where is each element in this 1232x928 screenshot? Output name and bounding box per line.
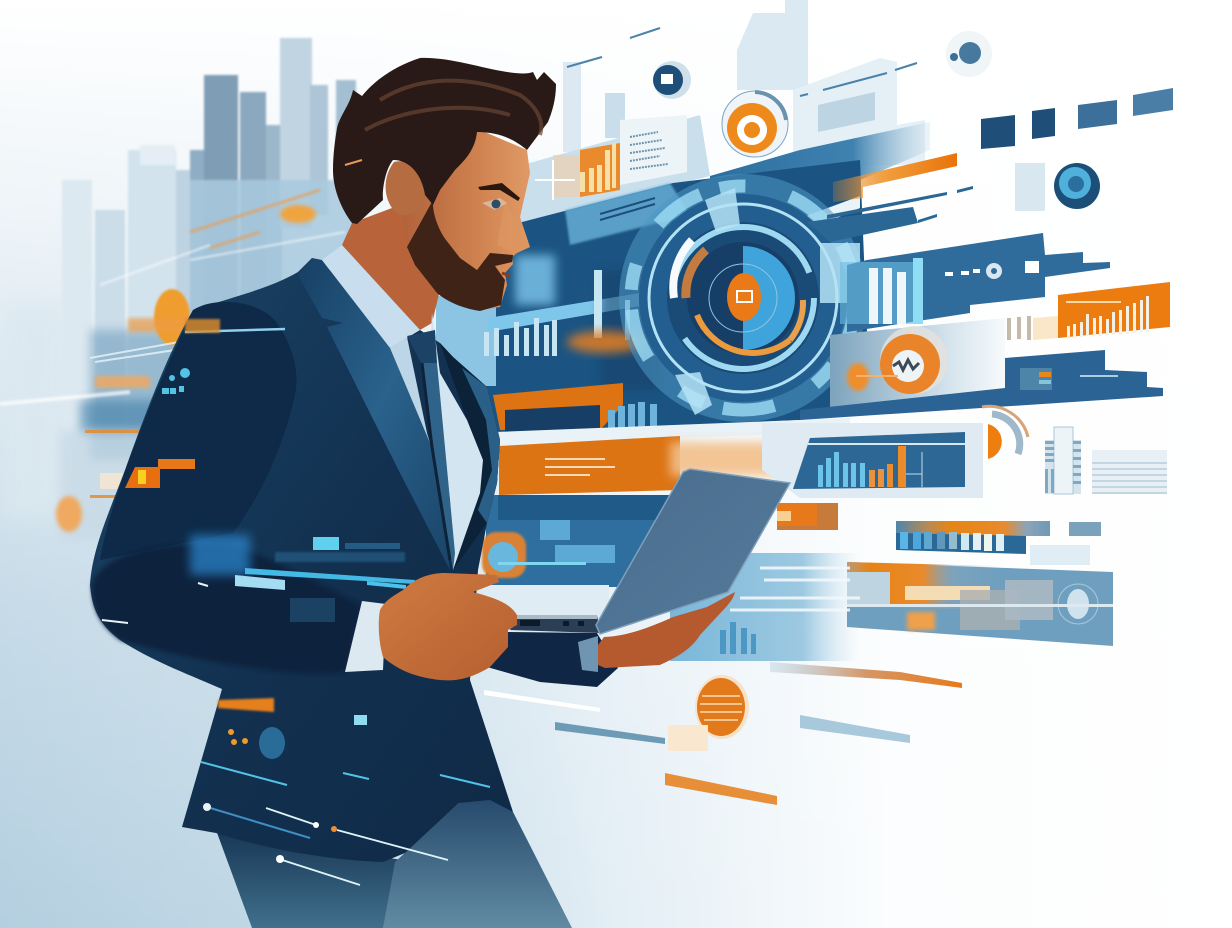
panel: dark bars upper right (807, 186, 973, 242)
man: left hand holding laptop (578, 592, 735, 672)
text block: light striped panel (1092, 450, 1167, 494)
panel: cyan haze area by chin (436, 296, 496, 386)
man: shirt and tie (322, 245, 483, 570)
panel: light strip behind top charts (505, 115, 710, 222)
icon: dark circle top (653, 61, 691, 99)
panel: dark mini dashboard (800, 350, 1163, 420)
icon: blue globe badge (1015, 163, 1100, 211)
tie (407, 330, 455, 570)
panel: small orange blur (777, 503, 838, 530)
icon: squares row (981, 88, 1173, 149)
panel: lower right dashboard (847, 562, 1113, 646)
chart: grey mini bars (989, 316, 1031, 340)
laptop keyboard base (510, 615, 600, 633)
chart: radial hud gauge (619, 174, 867, 422)
panel: pale under strip (484, 585, 609, 615)
man: head (333, 58, 556, 311)
chart: right striped tower (1045, 427, 1081, 494)
panel: faded blue streaks (484, 690, 910, 744)
panel: frame around bar dashboard (762, 423, 983, 498)
beard (407, 200, 513, 311)
panel: orange slash bottom (665, 725, 777, 805)
icon: orange house badge (722, 91, 788, 157)
text block: light page with lines (620, 115, 687, 185)
hair (333, 58, 556, 224)
panel: orange topped bar panel (896, 521, 1101, 565)
mouth (502, 273, 510, 276)
man: neck (342, 205, 440, 348)
panel: orange strip row 2 (499, 436, 680, 495)
city skyline (62, 38, 360, 440)
laptop screen (596, 469, 790, 634)
panel: main right band (847, 233, 1110, 332)
panel: cyan blocks around gauge (675, 188, 860, 415)
panel: pale blue band right of laptop (670, 553, 860, 661)
left lapel (298, 258, 450, 570)
central dashboard wall (436, 31, 1173, 805)
chart: blue bars beside orange strip (608, 402, 657, 429)
man: jacket (90, 258, 513, 885)
left data panels behind man (0, 190, 345, 540)
nose (497, 200, 530, 253)
laptop (487, 469, 790, 687)
icon: top right dot (946, 31, 992, 77)
panel: dashboard with dark bars (793, 432, 965, 489)
chart: white bars on right band (869, 268, 906, 324)
panel: upper blue band (710, 122, 930, 230)
panel: right cyan pane (790, 196, 860, 238)
chart: white and blue bars in main band (484, 270, 630, 356)
panel: lower blue strip (486, 495, 676, 587)
icon: half orange gauge (982, 406, 1028, 459)
man: shirt cuff (345, 601, 386, 672)
face (400, 130, 530, 310)
icon: orange gauge waveform (847, 326, 948, 394)
shirt right (430, 313, 483, 570)
forearm shadow (92, 544, 362, 674)
eye (482, 198, 507, 210)
panel: main dark wall (445, 160, 870, 442)
man: trousers (216, 795, 572, 928)
upper pale city and panels (563, 0, 925, 165)
chart: top small orange bar chart (535, 143, 620, 200)
shirt sliver (390, 337, 430, 443)
right lapel (440, 343, 500, 570)
man: right hand (379, 573, 517, 680)
panel: horizontal light streaks (730, 568, 860, 610)
upper sleeve (100, 302, 296, 560)
collar left (322, 245, 420, 348)
ear (386, 161, 425, 215)
chart: orange bar chart (1033, 282, 1170, 340)
icon: small orange ring near laptop (482, 532, 586, 578)
panel: orange slash top right (833, 153, 957, 202)
icon: orange striped coin (695, 675, 749, 739)
panel: glow orange lights (567, 331, 643, 353)
panel: long thin orange slash (770, 662, 962, 688)
panel: orange strip row 1 (493, 383, 623, 430)
brow (478, 183, 520, 201)
chart: blue bars below laptop (720, 622, 756, 654)
panel: pale fade band under bars (830, 318, 1005, 408)
panel: white strip (495, 418, 850, 444)
icon: white dot row (945, 261, 1039, 279)
laptop forearm (487, 632, 618, 687)
jacket data streaks (102, 319, 490, 885)
